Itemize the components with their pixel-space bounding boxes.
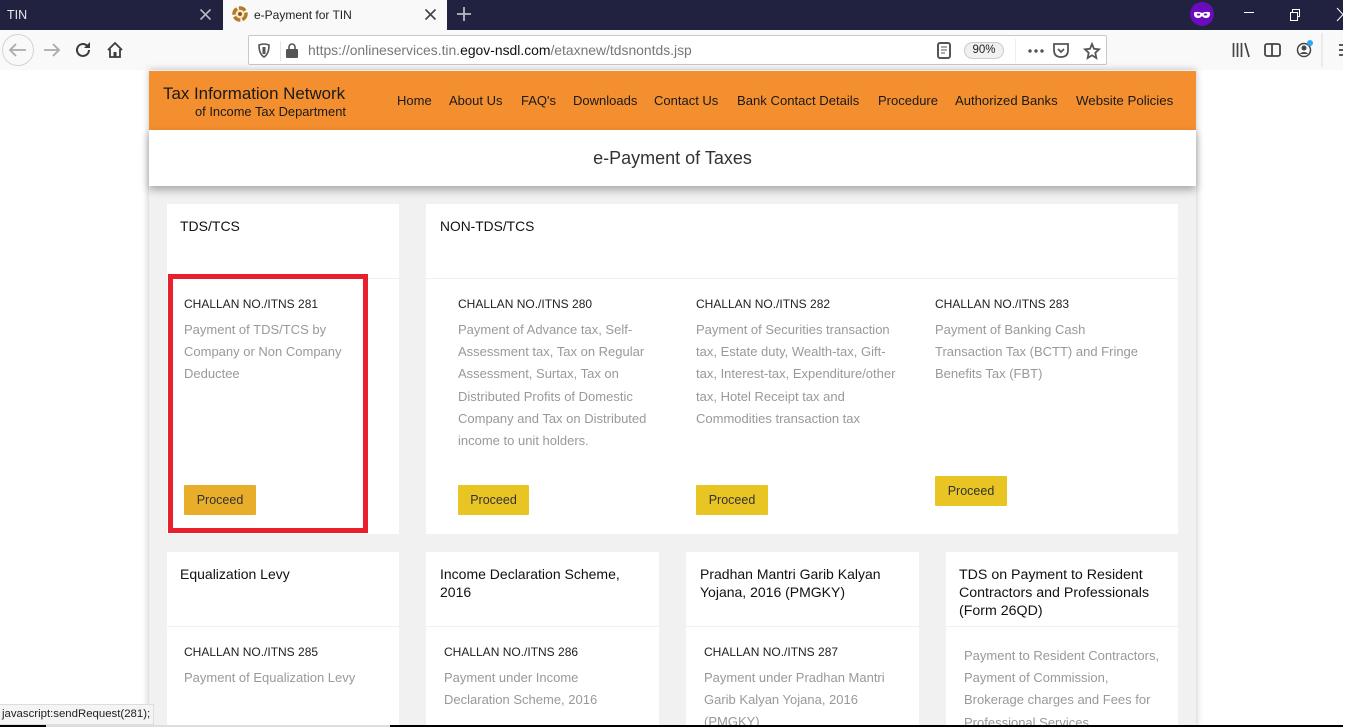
heading: TDS on Payment to Resident: [959, 567, 1143, 583]
navigation menu: Website Policies: [1076, 93, 1173, 108]
challan 283 description: Benefits Tax (FBT): [935, 366, 1042, 381]
toolbar icons right: [1232, 33, 1343, 67]
description: Company or Non Company: [184, 344, 342, 359]
status bar link: javascript:sendRequest(281);: [2, 708, 150, 720]
challan 282 description: tax, Estate duty, Wealth-tax, Gift-: [696, 344, 886, 359]
tab: TIN: TIN: [7, 8, 27, 22]
challan 282 label: CHALLAN NO./ITNS 282: [696, 297, 830, 311]
zoom level pill: [964, 42, 1004, 59]
navigation menu: Authorized Banks: [955, 93, 1058, 108]
description: Payment under Income: [444, 670, 578, 685]
challan 282 description: tax, Hotel Receipt tax and: [696, 389, 845, 404]
button: proceed: [184, 485, 256, 515]
address bar security icons: [258, 41, 298, 61]
challan 283 label: CHALLAN NO./ITNS 283: [935, 297, 1069, 311]
challan 282 description: Commodities transaction tax: [696, 411, 860, 426]
navigation menu: [397, 93, 1173, 108]
navigation menu: Contact Us: [654, 93, 718, 108]
description: Declaration Scheme, 2016: [444, 692, 597, 707]
description: Payment to Resident Contractors,: [964, 648, 1159, 663]
heading: Yojana, 2016 (PMGKY): [700, 584, 845, 600]
description: Brokerage charges and Fees for: [964, 692, 1150, 707]
button: proceed 283: [935, 476, 1007, 506]
browser tab bar: [0, 0, 1343, 30]
navigation icons: [2, 34, 123, 66]
heading: (Form 26QD): [959, 603, 1043, 619]
challan 280 description: [458, 322, 646, 448]
address bar: [248, 35, 1107, 65]
challan 282 description: tax, Interest-tax, Expenditure/other: [696, 366, 895, 381]
description: Payment under Pradhan Mantri: [704, 670, 885, 685]
challan 280 description: Assessment tax, Tax on Regular: [458, 344, 644, 359]
description: [704, 670, 885, 727]
challan 282 description: [696, 322, 896, 426]
bottom edge centre: [46, 725, 390, 727]
challan 280 description: Payment of Advance tax, Self-: [458, 322, 632, 337]
description: Payment of Commission,: [964, 670, 1108, 685]
button: proceed 280: [458, 485, 529, 515]
challan 283 description: Transaction Tax (BCTT) and Fringe: [935, 344, 1138, 359]
bottom edge strip: [0, 725, 1343, 727]
navigation menu: Procedure: [878, 93, 938, 108]
challan 283 description: Payment of Banking Cash: [935, 322, 1085, 337]
heading: [440, 566, 620, 600]
site logo subtitle: of Income Tax Department: [195, 104, 346, 119]
browser toolbar: [0, 30, 1343, 70]
heading: 2016: [440, 584, 471, 600]
panel: PMGKY: [686, 552, 919, 727]
heading: Income Declaration Scheme,: [440, 566, 620, 582]
window controls: [1244, 8, 1343, 22]
heading: [959, 567, 1149, 619]
button: proceed 280: Proceed: [470, 493, 517, 507]
site header bar: [149, 71, 1196, 130]
page title band: [149, 130, 1196, 186]
new tab plus icon: [457, 7, 471, 21]
challan label: CHALLAN NO./ITNS 287: [704, 645, 838, 659]
challan label: CHALLAN NO./ITNS 281: [184, 297, 318, 311]
active tab title: e-Payment for TIN: [254, 8, 352, 22]
icon: site favicon: [232, 6, 248, 22]
active tab close icon: [425, 8, 436, 20]
heading: TDS/TCS: [180, 218, 240, 234]
navigation menu: Downloads: [573, 93, 637, 108]
panel: Equalization Levy: [167, 552, 399, 727]
challan 283 description: [935, 322, 1138, 381]
challan label: CHALLAN NO./ITNS 286: [444, 645, 578, 659]
panel: NON-TDS/TCS: [426, 204, 1178, 534]
button: proceed 283: Proceed: [948, 484, 994, 498]
description: Deductee: [184, 366, 240, 381]
panel: TDS/TCS: [167, 204, 399, 534]
button: proceed 282: Proceed: [709, 493, 755, 507]
active tab: [223, 0, 447, 30]
heading: Pradhan Mantri Garib Kalyan: [700, 566, 881, 582]
challan 280 description: income to unit holders.: [458, 433, 589, 448]
icon: private browsing mask: [1190, 2, 1214, 26]
heading: Equalization Levy: [180, 566, 290, 582]
reader icon: [937, 42, 951, 59]
description: [964, 648, 1159, 727]
button: proceed: Proceed: [197, 493, 243, 507]
red highlight box: [168, 274, 368, 533]
challan 282 description: Payment of Securities transaction: [696, 322, 890, 337]
navigation menu: About Us: [449, 93, 502, 108]
navigation menu: Home: [397, 93, 432, 108]
challan 280 label: CHALLAN NO./ITNS 280: [458, 297, 592, 311]
URL: https://onlineservices.tin.egov-nsdl.com/etaxnew/tdsnontds.jsp: [308, 42, 692, 58]
navigation menu: Bank Contact Details: [737, 93, 859, 108]
description: [184, 322, 342, 381]
description: Payment of TDS/TCS by: [184, 322, 326, 337]
challan 280 description: Company and Tax on Distributed: [458, 411, 646, 426]
heading: [700, 566, 881, 600]
status bar link: [0, 704, 154, 725]
address bar actions: [1015, 39, 1101, 63]
zoom level pill: 90%: [972, 44, 996, 56]
site logo title: Tax Information Network: [163, 84, 345, 103]
page backdrop panel: [149, 70, 1196, 727]
challan 280 description: Assessment, Surtax, Tax on: [458, 366, 619, 381]
description: [444, 670, 597, 707]
panel: Income Declaration Scheme: [426, 552, 659, 727]
challan label: CHALLAN NO./ITNS 285: [184, 645, 318, 659]
challan 280 description: Distributed Profits of Domestic: [458, 389, 633, 404]
description: Garib Kalyan Yojana, 2016: [704, 692, 858, 707]
navigation menu: FAQ's: [521, 93, 556, 108]
heading: Contractors and Professionals: [959, 585, 1149, 601]
panel: TDS on Payment to Resident Contractors: [946, 552, 1178, 727]
description: Payment of Equalization Levy: [184, 670, 355, 685]
button: proceed 282: [696, 485, 768, 515]
tab close icon: [200, 8, 211, 20]
page title: e-Payment of Taxes: [593, 148, 752, 168]
heading: NON-TDS/TCS: [440, 219, 534, 234]
